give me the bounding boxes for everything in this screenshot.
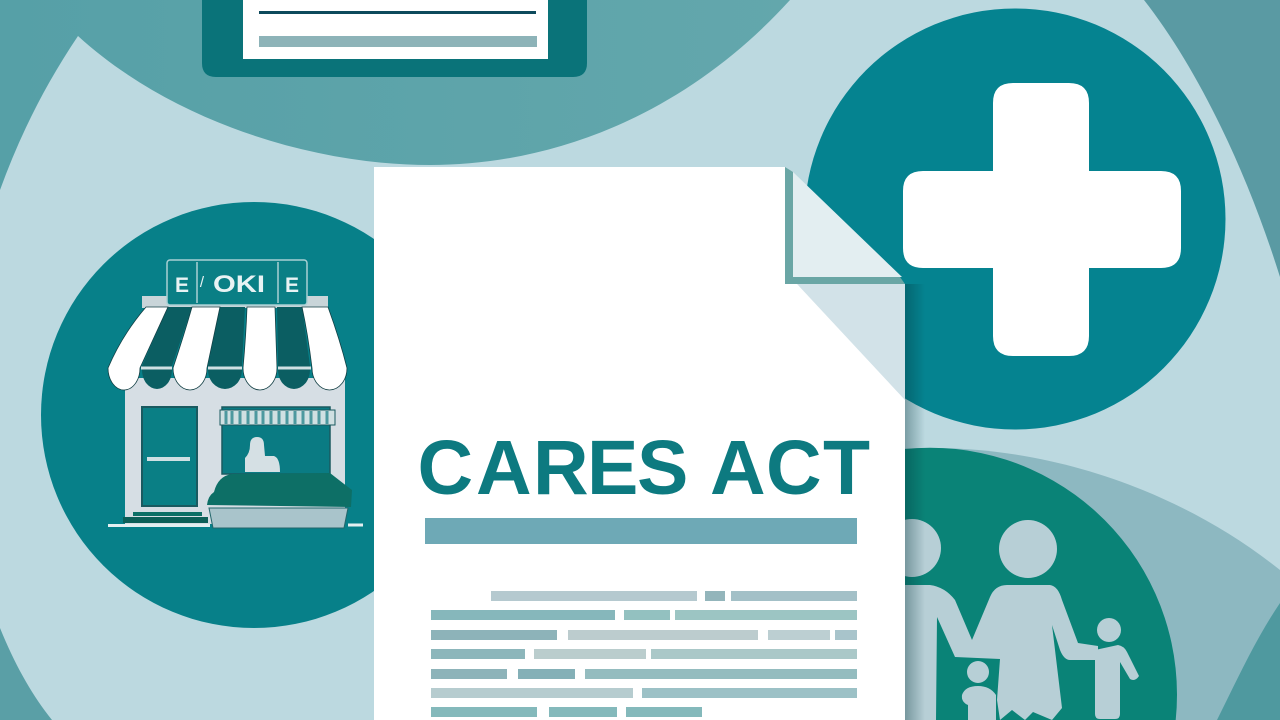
clipboard paper [243, 0, 548, 59]
background: bottom-left teal corner [0, 628, 52, 720]
medical cross icon [804, 8, 1226, 430]
awning white stripes [108, 307, 347, 390]
storefront building [108, 260, 363, 528]
folded corner [785, 167, 905, 400]
child body right [1095, 645, 1139, 719]
entry step upper [133, 512, 202, 516]
body text lines [431, 591, 857, 717]
window pane [222, 407, 330, 474]
background: top teal arc with left corner [0, 0, 790, 190]
child head small [967, 661, 989, 683]
clipboard backing [202, 0, 587, 77]
awning valance bars [141, 366, 311, 370]
sign dividers [197, 262, 278, 303]
window figure [245, 437, 280, 472]
awning dark stripes [142, 307, 347, 389]
child head right [1097, 618, 1121, 642]
door panel [142, 407, 197, 506]
family figures [883, 519, 1139, 720]
adult head centre [999, 520, 1057, 578]
store window [220, 407, 335, 474]
title: CARES ACT [0, 425, 870, 511]
storefront icon [41, 202, 467, 628]
store circle [41, 202, 467, 628]
document shadow [905, 284, 925, 720]
clipboard icon [202, 0, 587, 77]
background: top-right teal corner [1144, 0, 1280, 277]
white cross [903, 83, 1181, 356]
store sign [167, 260, 307, 305]
sign letter right: E [285, 274, 299, 297]
ground line [108, 524, 363, 527]
window blind lines [226, 411, 327, 424]
background: bottom-right teal corner [1217, 603, 1280, 720]
planter [209, 508, 348, 528]
awning [108, 307, 347, 390]
store door [142, 407, 197, 506]
entry step lower [123, 517, 208, 523]
clipboard grey bar [259, 36, 537, 47]
fold cast shadow [797, 284, 905, 400]
adults bodies with joined arms [905, 585, 1098, 720]
building wall [125, 378, 345, 524]
background: blue-grey swoosh behind family [900, 448, 1280, 720]
adult head left [905, 519, 941, 577]
family circle [683, 448, 1177, 720]
window blind strip [220, 410, 335, 425]
sign name: OKI [213, 271, 265, 298]
door handle [147, 457, 190, 461]
document page [374, 167, 905, 720]
fold flap [793, 172, 902, 277]
sign board [167, 260, 307, 305]
cross circle [804, 8, 1226, 430]
fold border [785, 167, 905, 284]
family icon [905, 448, 1177, 720]
clipboard dark rule [259, 11, 536, 14]
shrub [207, 473, 352, 507]
roof ledge [142, 296, 328, 308]
sign letter left: E [175, 274, 189, 297]
sign slash: / [200, 274, 205, 291]
heading bar [425, 518, 857, 544]
child body small [962, 686, 996, 720]
document [0, 167, 905, 720]
